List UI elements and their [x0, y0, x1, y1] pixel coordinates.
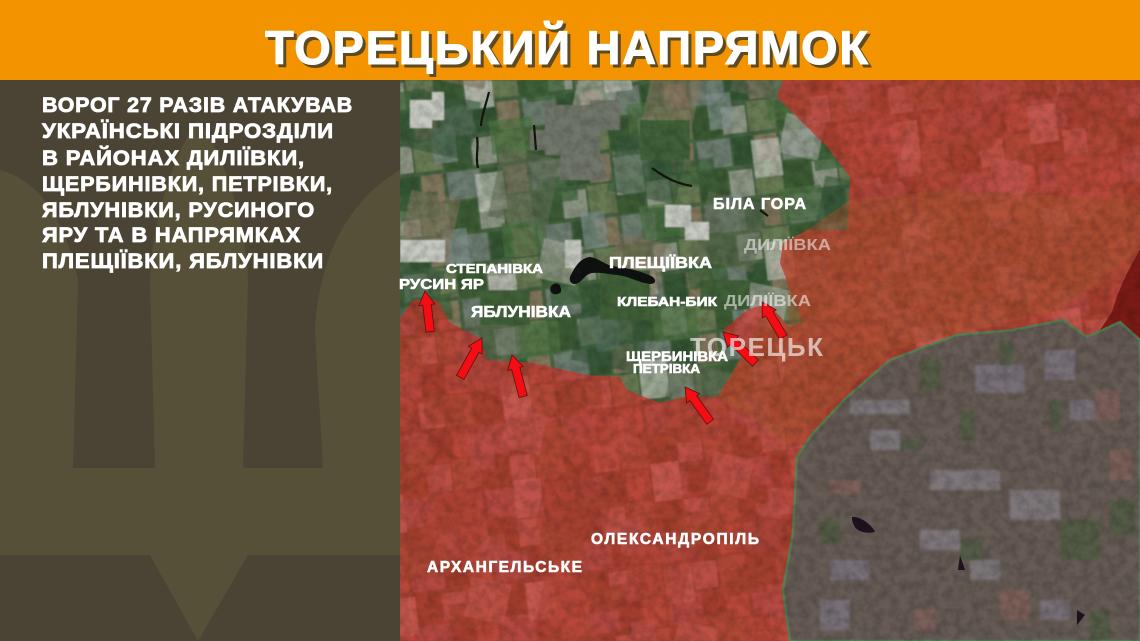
label: Toretsk: ТОРЕЦЬК: [690, 332, 823, 362]
panel: left text panel: [0, 80, 400, 641]
map labels: [399, 196, 832, 576]
label: Plishchiivka: ПЛЕЩІЇВКА: [609, 254, 713, 272]
arrow: Rusyn Yar: [417, 290, 438, 333]
map texture noise: [400, 80, 1140, 641]
arrow: Toretsk: [717, 326, 761, 369]
text block: attacks summary: [42, 94, 353, 273]
arrow: Petrivka: [678, 382, 716, 427]
arrow: Yablunivka south: [504, 353, 531, 399]
text block: attacks summary: ЯРУ ТА В НАПРЯМКАХ: [42, 224, 301, 247]
text block: attacks summary: ВОРОГ 27 РАЗІВ АТАКУВАВ: [42, 94, 353, 117]
ravines: [477, 92, 768, 216]
label: Petrivka: ПЕТРІВКА: [633, 362, 700, 376]
occupied territory overlay: [400, 80, 1140, 641]
arrow: Dyliivka: [755, 298, 790, 341]
title: ТОРЕЦЬКИЙ НАПРЯМОК: [265, 21, 868, 74]
label: Yablunivka: ЯБЛУНІВКА: [471, 304, 571, 321]
trident watermark: [0, 120, 400, 641]
label: Shcherbynivka: ЩЕРБИНІВКА: [626, 348, 728, 364]
text block: attacks summary: УКРАЇНСЬКІ ПІДРОЗДІЛИ: [42, 120, 334, 143]
text block: attacks summary: ЯБЛУНІВКИ, РУСИНОГО: [42, 199, 315, 222]
reservoir: [550, 257, 655, 294]
farmland mosaic: [400, 80, 1140, 641]
dark reservoir zone: [1100, 250, 1140, 340]
arrow: Yablunivka west: [453, 334, 489, 381]
header bar: [0, 0, 1140, 80]
Donetsk-side grey zone: [783, 320, 1140, 641]
text block: attacks summary: В РАЙОНАХ ДИЛІЇВКИ,: [42, 146, 305, 170]
label: Kleban-Byk: КЛЕБАН-БИК: [617, 294, 717, 309]
label: Oleksandropil: ОЛЕКСАНДРОПІЛЬ: [591, 531, 759, 548]
title: ТОРЕЦЬКИЙ НАПРЯМОК: [268, 24, 871, 77]
orange-brown tint around Toretsk: [717, 190, 1140, 445]
label: Rusyn Yar: РУСИН ЯР: [399, 276, 484, 293]
label: Bila Hora: БІЛА ГОРА: [713, 196, 806, 213]
arrows: attack directions: [417, 290, 790, 427]
map: [400, 80, 1140, 641]
label: Arkhanhelske: АРХАНГЕЛЬСЬКЕ: [427, 559, 582, 576]
label: Dyliivka north: ДИЛІЇВКА: [744, 236, 832, 254]
text block: attacks summary: ЩЕРБИНІВКИ, ПЕТРІВКИ,: [42, 173, 333, 196]
text block: attacks summary: ПЛЕЩІЇВКИ, ЯБЛУНІВКИ: [42, 250, 324, 273]
label: Dyliivka south: ДИЛІЇВКА: [724, 292, 812, 310]
label: Stepanivka: СТЕПАНІВКА: [446, 261, 544, 276]
